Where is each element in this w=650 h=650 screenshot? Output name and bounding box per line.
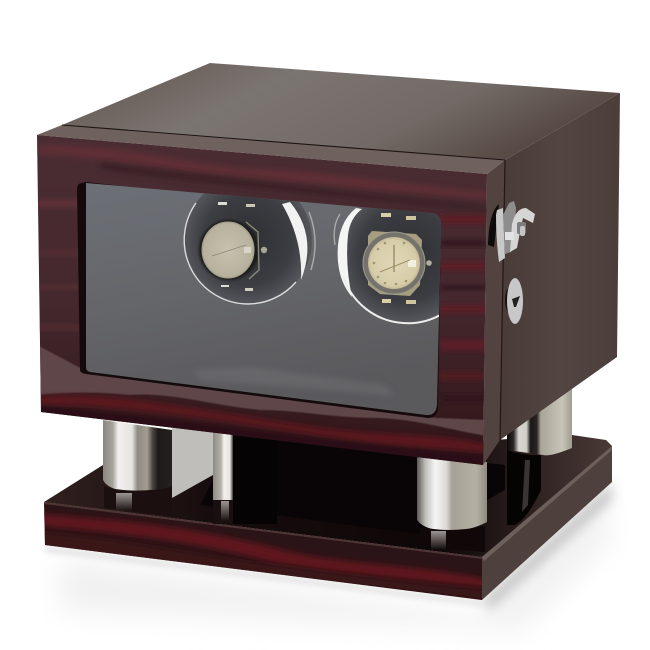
base right side: [482, 446, 612, 600]
interior tray reflection: [200, 370, 388, 394]
column: back middle: [213, 432, 277, 524]
window recess: [77, 182, 441, 418]
floor shadow: [45, 482, 612, 630]
glossy reflection band: [37, 345, 487, 436]
glass pane: [86, 183, 441, 415]
door front frame: [37, 135, 487, 470]
right watch: [363, 213, 432, 304]
lock plate: [505, 278, 523, 324]
door side strip: [483, 160, 505, 465]
column: back right: [507, 370, 572, 525]
box top face: [37, 63, 620, 174]
illustration: double watch winder box: [37, 63, 620, 626]
box right side: [483, 93, 620, 465]
wall behind the columns: [172, 428, 213, 498]
dark interior behind the columns: [200, 432, 505, 535]
base plinth: [40, 428, 612, 600]
left watch: [199, 202, 267, 291]
base front face: [44, 502, 482, 600]
column reflection: [104, 486, 172, 516]
red lower grain: [37, 396, 487, 452]
right winder drum: [334, 207, 441, 324]
column: front right: [417, 455, 487, 552]
latch: [488, 201, 535, 262]
column reflection: [420, 526, 485, 552]
left winder drum: [184, 194, 316, 305]
wood grain: [37, 145, 487, 199]
door top lip: [37, 125, 505, 174]
column: front left: [103, 420, 172, 516]
base top surface: [44, 435, 612, 557]
